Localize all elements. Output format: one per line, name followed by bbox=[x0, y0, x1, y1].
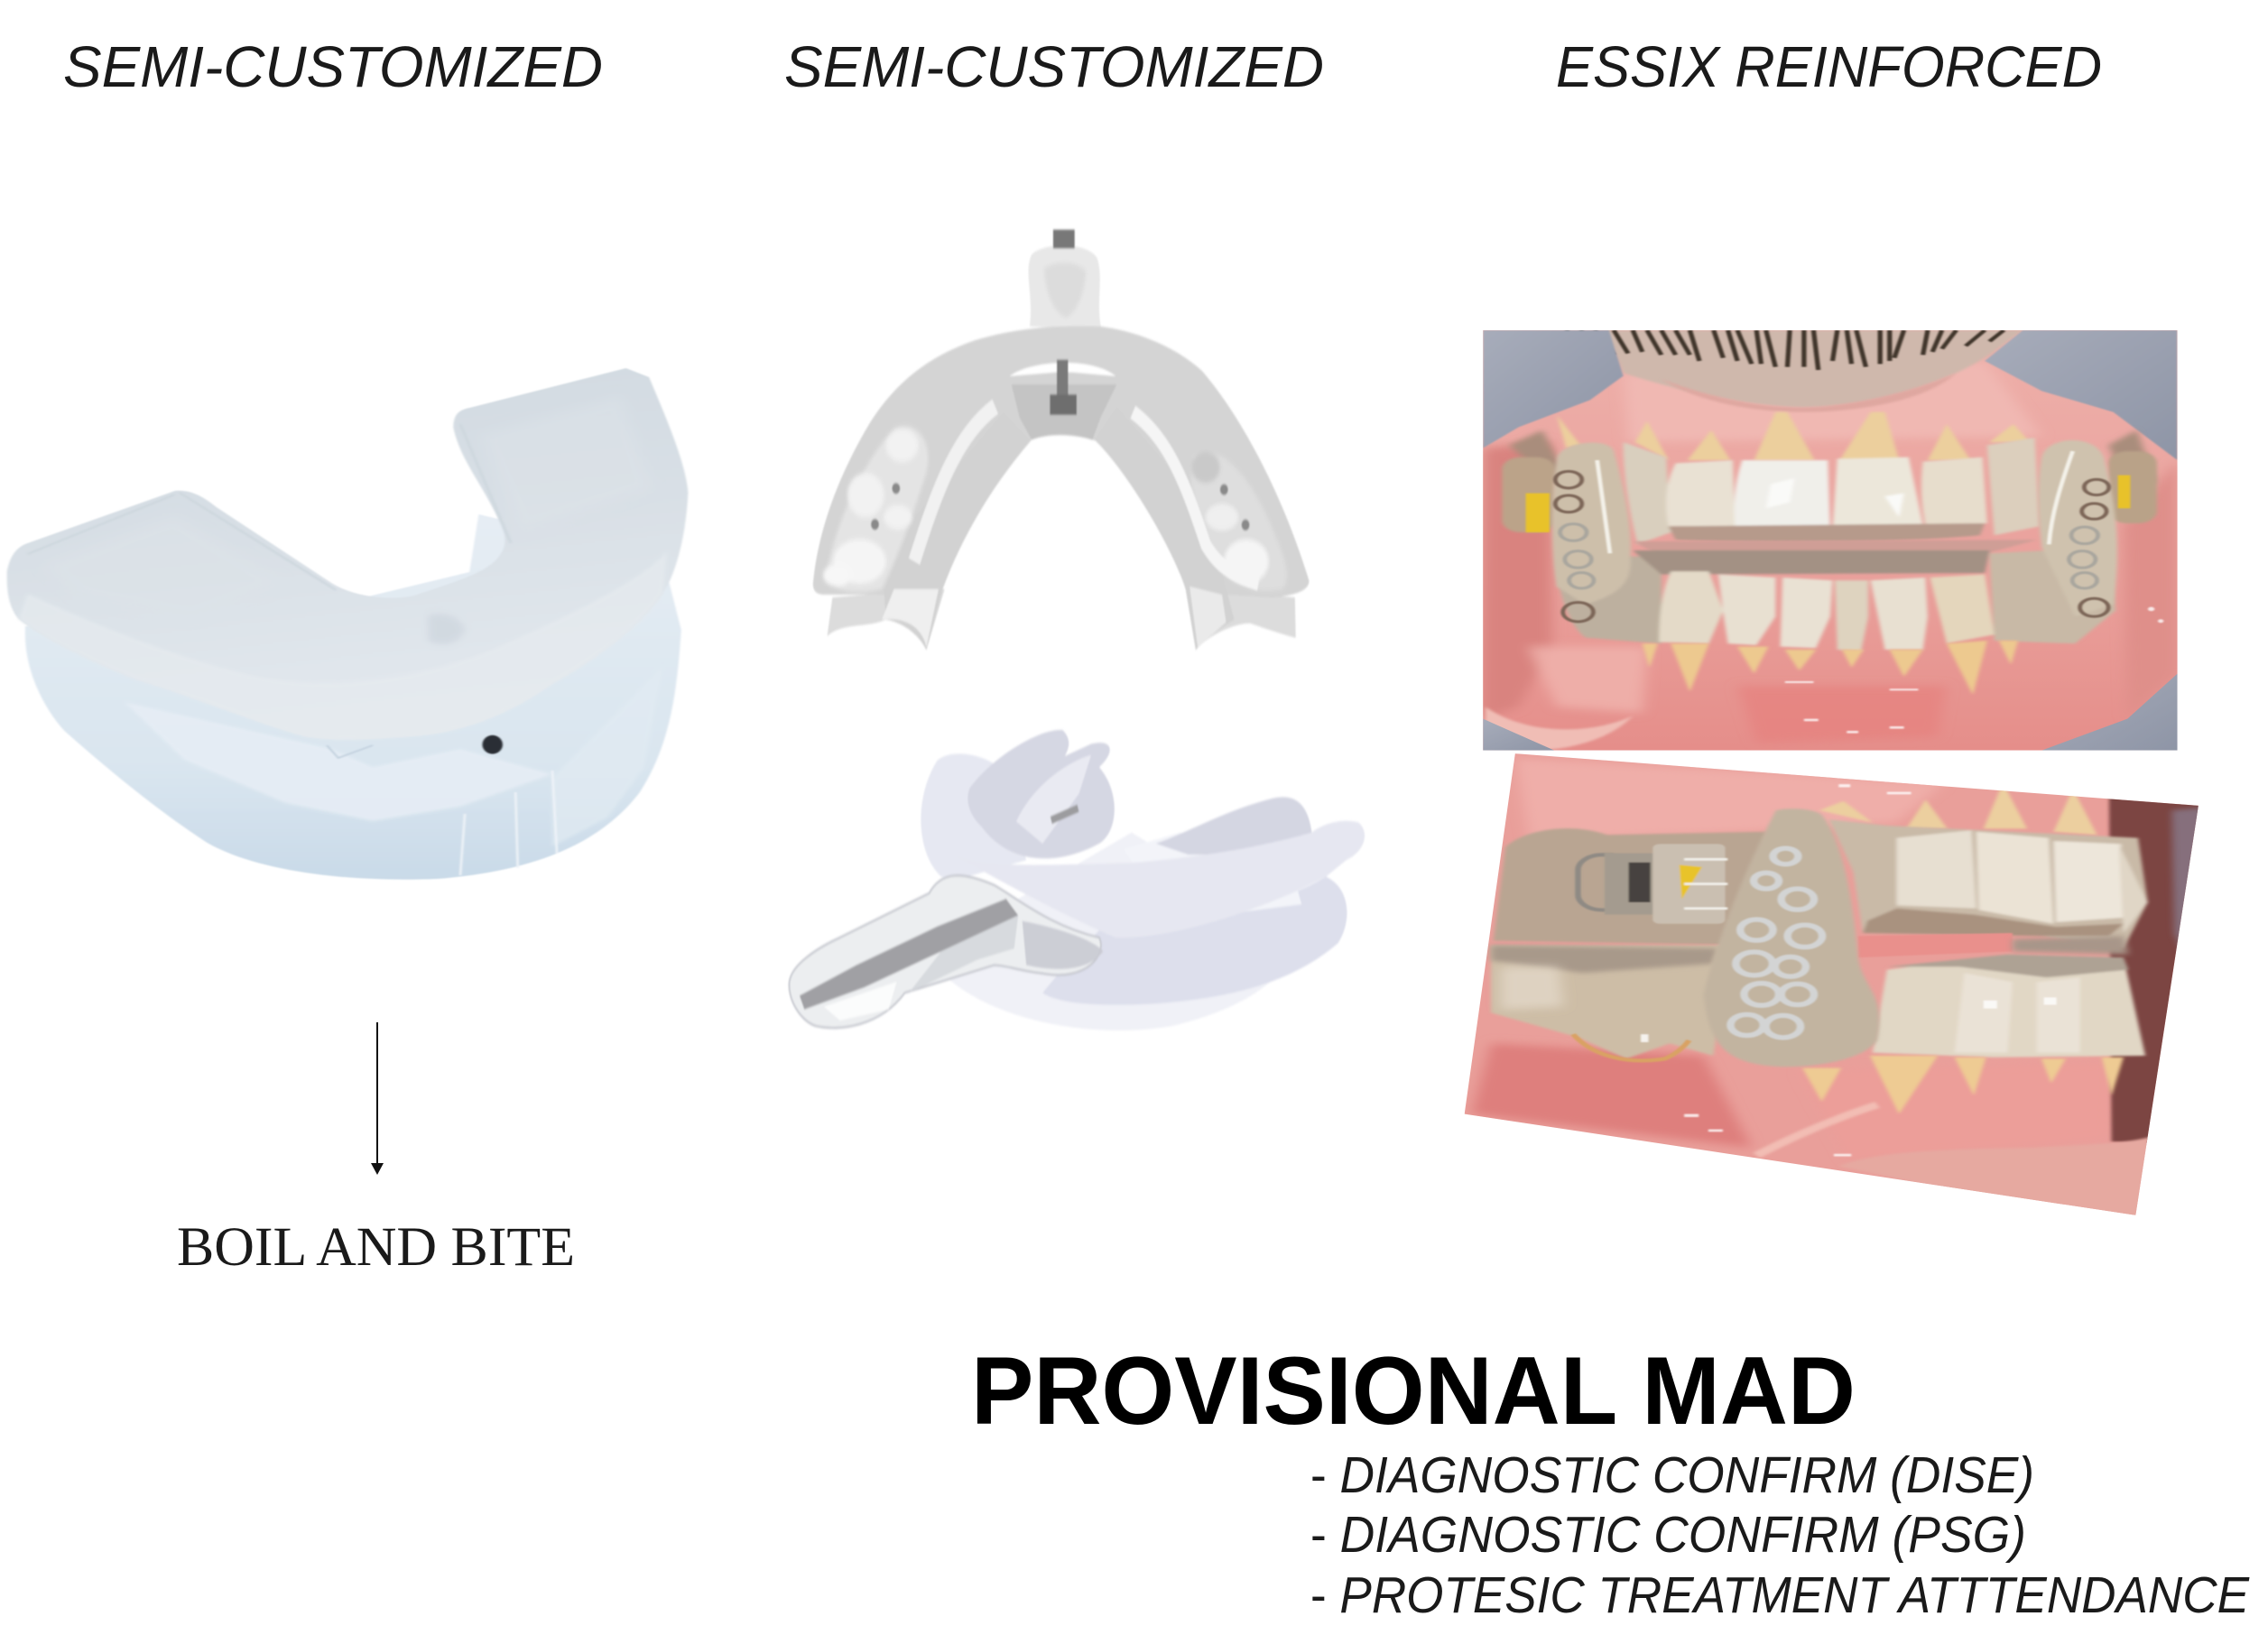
upper aligner left bbox=[1494, 828, 1766, 946]
central tab bbox=[1704, 808, 1880, 1067]
photo: lateral view of essix reinforced appliance bbox=[1462, 749, 2206, 1222]
right screw bbox=[2108, 451, 2157, 523]
left wing bbox=[884, 412, 1030, 650]
mesh left bbox=[1555, 471, 1594, 622]
list item: psg: - DIAGNOSTIC CONFIRM (PSG) bbox=[1310, 1506, 2026, 1564]
pale clear gap bbox=[1124, 833, 1301, 921]
pink gap bbox=[1858, 933, 2013, 957]
retractors bbox=[1483, 330, 1624, 448]
list: indications bbox=[1310, 1446, 2250, 1624]
arch tray bbox=[813, 326, 1310, 597]
lower roots bbox=[1643, 641, 2018, 695]
central bridge bbox=[1012, 384, 1116, 439]
tooth impressions left bbox=[823, 426, 929, 593]
upper roots bbox=[1820, 790, 2097, 836]
bottom lip bbox=[1838, 1137, 2150, 1218]
upper tray bbox=[7, 368, 688, 740]
upper lip bbox=[1605, 330, 2023, 408]
lower tray bbox=[25, 514, 681, 880]
white wire strips bbox=[914, 407, 995, 561]
lip highlights bbox=[882, 589, 939, 647]
clear cup bbox=[921, 753, 1026, 880]
arrow: down to boil and bite bbox=[371, 1022, 384, 1175]
heading: semi-customized left: SEMI-CUSTOMIZED bbox=[63, 34, 603, 99]
list item: dise: - DIAGNOSTIC CONFIRM (DISE) bbox=[1310, 1446, 2034, 1504]
lower roots bbox=[1802, 1056, 2124, 1114]
metal mesh bbox=[1730, 848, 1822, 1038]
label: boil and bite: BOIL AND BITE bbox=[177, 1217, 575, 1278]
upper teeth bbox=[1829, 819, 2148, 948]
lower lavender mass bbox=[1042, 877, 1347, 1005]
mesh right bbox=[2069, 479, 2109, 616]
device: boil and bite mouthguard bbox=[7, 368, 688, 880]
main band bbox=[948, 821, 1365, 937]
lower aligner sides bbox=[1557, 548, 2115, 651]
device: lavender semi-customized tray with handle bbox=[789, 730, 1365, 1030]
upper teeth bbox=[1624, 438, 2040, 544]
darker side tissue bbox=[1507, 429, 1558, 475]
neck and knob bbox=[1029, 245, 1101, 329]
handle bbox=[789, 875, 1101, 1028]
heading: essix reinforced: ESSIX REINFORCED bbox=[1556, 34, 2102, 99]
screw bbox=[482, 735, 503, 754]
rear upper tray bbox=[967, 730, 1115, 858]
photo: front view of essix reinforced appliance bbox=[1483, 330, 2178, 751]
lower teeth bbox=[1659, 571, 1723, 643]
glints bbox=[1641, 767, 2057, 1157]
device: gray semi-customized tray bbox=[813, 230, 1310, 650]
gum edge stain bbox=[1573, 1034, 1689, 1060]
title: provisional mad: PROVISIONAL MAD bbox=[971, 1336, 1856, 1445]
rear lips bbox=[828, 589, 945, 650]
right dark cheek bbox=[2109, 792, 2206, 1145]
moustache bbox=[1566, 330, 2004, 370]
right tab bbox=[2038, 440, 2117, 616]
upper roots bbox=[1557, 412, 2030, 460]
bottom plate bbox=[945, 833, 1301, 1030]
far upper tray bbox=[1156, 797, 1312, 854]
highlights bbox=[1785, 607, 2163, 734]
lower aligner right bbox=[1873, 955, 2145, 1058]
lower aligner left bbox=[1491, 946, 1733, 1058]
heading: semi-customized center: SEMI-CUSTOMIZED bbox=[784, 34, 1324, 99]
left screw bbox=[1502, 457, 1555, 532]
lip fold bbox=[1486, 707, 1633, 751]
left tab bbox=[1552, 443, 1631, 605]
right wing bbox=[1095, 407, 1234, 650]
tooth impressions right bbox=[1191, 452, 1287, 591]
screw bbox=[1578, 844, 1727, 924]
